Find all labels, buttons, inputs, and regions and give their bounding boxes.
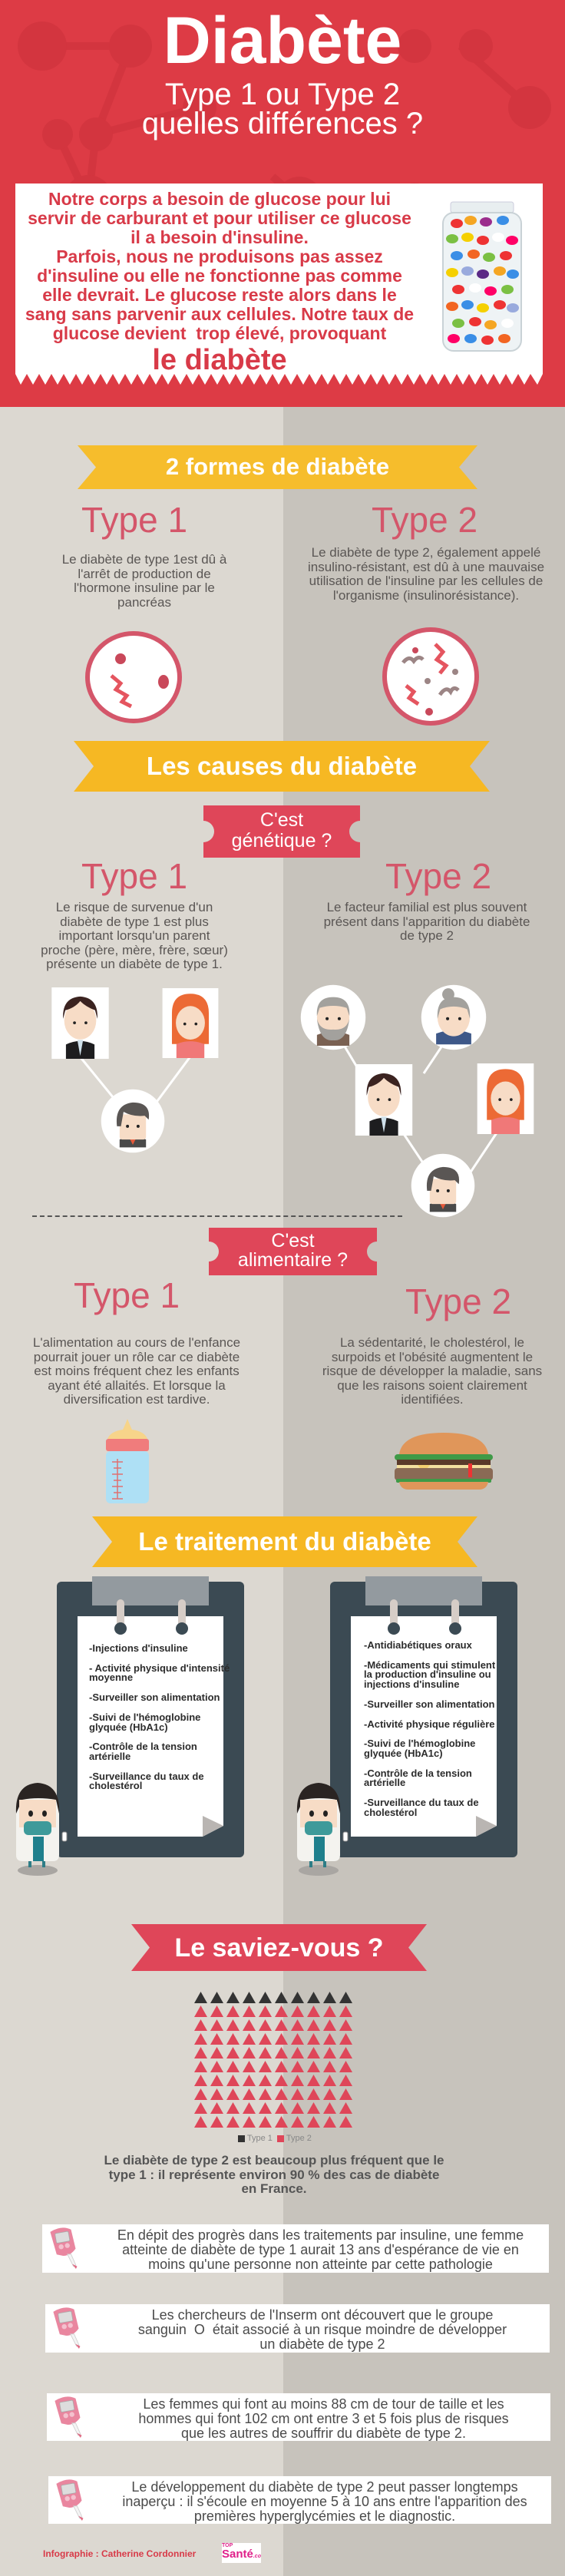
text: alimentaire type 2: risque de développer la maladie, sans	[322, 1364, 542, 1378]
intro text: Parfois, nous ne produisons pas assez	[56, 246, 383, 266]
icon: doctor	[296, 1783, 349, 1876]
list: type 1 treatments: -Surveiller son alimentation	[89, 1691, 220, 1703]
fact box 3: hommes qui font 102 cm ont entre 3 et 5 fois plus de risques	[138, 2411, 509, 2426]
text: alimentaire type 1: L'alimentation au cours de l'enfance	[33, 1335, 240, 1350]
fact box 3	[47, 2393, 550, 2441]
list: type 1 treatments	[89, 1642, 230, 1791]
banner: Les causes du diabète: Les causes du diabète	[147, 752, 417, 780]
intro text: le diabète	[152, 344, 287, 376]
fact box 2	[45, 2304, 550, 2353]
dashed separator	[32, 1215, 402, 1217]
clipboard: type 2 treatment	[296, 1576, 517, 1876]
ticket: C'est alimentaire ?	[209, 1228, 377, 1275]
text: alimentaire type 1	[33, 1335, 240, 1407]
list: type 2 treatments: -Surveiller son alimentation	[364, 1698, 494, 1710]
list: type 1 treatments: glyquée (HbA1c)	[89, 1721, 168, 1733]
banner: Le traitement du diabète	[92, 1516, 477, 1567]
legend: Type 1 Type 2	[247, 2134, 312, 2143]
avatar: father	[355, 1064, 413, 1136]
fact box 2: un diabète de type 2	[259, 2336, 385, 2352]
list: type 2 treatments: injections d'insuline	[364, 1678, 459, 1690]
header: red background with molecule pattern	[0, 0, 565, 407]
icon: glucometer	[47, 2306, 89, 2352]
text: alimentaire type 2: identifiées.	[401, 1392, 464, 1407]
text: alimentaire type 1: pourrait jouer un rôle car ce diabète	[34, 1350, 240, 1364]
list: type 2 treatments: -Médicaments qui stimulent	[364, 1659, 495, 1671]
list: type 2 treatments: la production d'insuline ou	[364, 1668, 491, 1680]
icon: glucometer	[50, 2478, 92, 2524]
ticket: C'est génétique ?: génétique ?	[232, 830, 332, 852]
fact box 3: que les autres de souffrir du diabète de type 2.	[181, 2426, 466, 2441]
text: alimentaire type 1: est moins fréquent chez les enfants	[34, 1364, 240, 1378]
list: type 2 treatments: -Antidiabétiques oraux	[364, 1639, 472, 1651]
banner: Le saviez-vous ?: Le saviez-vous ?	[174, 1933, 384, 1963]
list: type 2 treatments: cholestérol	[364, 1807, 417, 1818]
family tree type 1	[51, 987, 218, 1153]
list: type 1 treatments: - Activité physique d'intensité	[89, 1662, 230, 1674]
fact box 1: moins qu'une personne non atteinte par cette pathologie	[148, 2257, 493, 2272]
icon: jar of jelly beans	[442, 201, 522, 352]
avatar: mother	[163, 988, 218, 1058]
list: type 1 treatments: -Injections d'insuline	[89, 1642, 188, 1654]
text: genetic type 2: présent dans l'apparition du diabète	[324, 914, 530, 929]
text: type 2 definition: insulino-résistant, est dû à une mauvaise	[308, 559, 544, 574]
banner: Les causes du diabète	[74, 741, 490, 792]
text: alimentaire type 2: surpoids et l'obésité augmentent le	[332, 1350, 533, 1364]
intro text: Notre corps a besoin de glucose pour lui	[48, 189, 391, 209]
text: genetic type 1: présente un diabète de type 1.	[46, 957, 223, 971]
fact box 1: En dépit des progrès dans les traitements par insuline, une femme	[117, 2227, 524, 2243]
text: type 2 represents 90%	[104, 2153, 444, 2196]
fact box 4	[48, 2476, 551, 2524]
avatar: father	[51, 987, 109, 1059]
list: type 2 treatments: -Activité physique régulière	[364, 1718, 494, 1730]
avatar: grandmother	[421, 984, 487, 1050]
icon: glucometer	[51, 2227, 77, 2269]
intro text: servir de carburant et pour utiliser ce glucose	[28, 208, 411, 228]
intro text	[25, 189, 414, 376]
text: genetic type 1: important lorsqu'un parent	[58, 928, 210, 943]
avatar: child	[101, 1089, 164, 1153]
text: genetic type 2: Le facteur familial est plus souvent	[327, 900, 527, 914]
text: type 2 definition: Le diabète de type 2, également appelé	[312, 545, 540, 560]
fact box 1	[42, 2224, 549, 2273]
fact box 2: sanguin O était associé à un risque moindre de développer	[138, 2322, 507, 2337]
text: genetic type 1: Le risque de survenue d'un	[56, 900, 213, 914]
text: genetic type 2	[324, 900, 530, 943]
family tree type 2	[301, 984, 534, 1218]
logo: Top Santé: TOP	[222, 2543, 233, 2548]
list: type 2 treatments: glyquée (HbA1c)	[364, 1748, 443, 1759]
text: type 2 definition	[308, 545, 544, 602]
intro text: il a besoin d'insuline.	[131, 227, 309, 247]
list: type 1 treatments: -Suivi de l'hémoglobine	[89, 1711, 200, 1723]
list: type 2 treatments: -Contrôle de la tension	[364, 1767, 472, 1779]
banner: Le saviez-vous ?	[131, 1924, 427, 1971]
list: type 1 treatments: cholestérol	[89, 1780, 142, 1791]
icon: glucometer	[48, 2395, 91, 2441]
heading: Type 1 (génétique): Type 1	[81, 856, 187, 896]
icon: cell type 2	[382, 627, 479, 726]
avatar: grandfather	[301, 984, 365, 1050]
text: type 1 definition: l'hormone insuline par le	[74, 580, 215, 595]
list: type 1 treatments: -Surveillance du taux de	[89, 1771, 204, 1782]
banner: Le traitement du diabète: Le traitement du diabète	[138, 1527, 431, 1556]
fact box 4: inaperçu : il s'écoule en moyenne 5 à 10 ans entre l'apparition des	[122, 2494, 527, 2509]
fact box 4: premières hyperglycémies et le diagnostic.	[194, 2508, 455, 2524]
avatar: child	[411, 1153, 474, 1218]
avatar: mother	[477, 1063, 534, 1134]
fact box 4: Le développement du diabète de type 2 peut passer longtemps	[131, 2479, 518, 2495]
list: type 2 treatments	[364, 1639, 496, 1818]
heading: Type 2 (formes): Type 2	[372, 500, 477, 540]
logo: Top Santé	[222, 2543, 261, 2563]
chart: triangle pictogram 10% type 1 / 90% type 2	[194, 1992, 352, 2143]
list: type 1 treatments: moyenne	[89, 1672, 133, 1683]
list: type 1 treatments: artérielle	[89, 1751, 131, 1762]
intro text: glucose devient trop élevé, provoquant	[53, 323, 386, 343]
subtitle: Type 1 ou Type 2	[165, 78, 400, 111]
subtitle	[142, 78, 423, 141]
text: type 1 definition: pancréas	[117, 594, 171, 610]
text: type 2 represents 90%: Le diabète de type 2 est beaucoup plus fréquent que le	[104, 2153, 444, 2168]
text: genetic type 1: diabète de type 1 est plus	[60, 914, 209, 929]
list: type 2 treatments: -Surveillance du taux de	[364, 1797, 479, 1808]
text: alimentaire type 2: que les raisons soient clairement	[337, 1377, 527, 1393]
intro text: sang sans parvenir aux cellules. Notre taux de	[25, 304, 414, 324]
intro text: d'insuline ou elle ne fonctionne pas comme	[37, 266, 402, 286]
heading: Type 1 (alimentaire): Type 1	[74, 1275, 180, 1315]
intro text: elle devrait. Le glucose reste alors dans le	[42, 285, 397, 305]
text: genetic type 2: de type 2	[400, 928, 454, 943]
list: type 2 treatments: -Suivi de l'hémoglobine	[364, 1738, 475, 1749]
ticket: C'est alimentaire ?: alimentaire ?	[238, 1249, 348, 1271]
text: type 1 definition	[62, 552, 227, 610]
text: type 1 definition: l'arrêt de production de	[78, 567, 211, 580]
intro box	[15, 184, 543, 385]
text: alimentaire type 2: La sédentarité, le cholestérol, le	[340, 1335, 524, 1350]
text: type 2 represents 90%: type 1 : il représente environ 90 % des cas de diabète	[109, 2167, 439, 2182]
ticket: C'est alimentaire ?: C'est	[271, 1230, 315, 1252]
text: genetic type 1: proche (père, mère, frère, sœur)	[41, 943, 228, 957]
fact box 2: Les chercheurs de l'Inserm ont découvert que le groupe	[152, 2307, 493, 2323]
clipboard: type 1 treatment	[15, 1576, 244, 1876]
banner: 2 formes de diabète	[78, 445, 477, 489]
text: alimentaire type 1: diversification est tardive.	[64, 1392, 210, 1407]
text: type 2 represents 90%: en France.	[241, 2181, 307, 2196]
text: type 2 definition: l'organisme (insulinorésistance).	[333, 588, 519, 602]
fact box 1: atteinte de diabète de type 1 aurait 13 ans d'espérance de vie en	[122, 2242, 519, 2257]
text: type 2 definition: utilisation de l'insuline par les cellules de	[309, 574, 543, 588]
list: type 2 treatments: artérielle	[364, 1777, 405, 1788]
heading: Type 2 (génétique): Type 2	[385, 856, 491, 896]
icon: cell type 1	[85, 631, 182, 723]
text: genetic type 1	[41, 900, 228, 971]
ticket: C'est génétique ?	[203, 805, 360, 858]
heading: Type 2 (alimentaire): Type 2	[405, 1281, 511, 1321]
list: type 1 treatments: -Contrôle de la tension	[89, 1741, 197, 1752]
icon: baby bottle	[106, 1419, 149, 1503]
text: alimentaire type 1: ayant été allaités. Et lorsque la	[48, 1377, 226, 1393]
icon: hamburger	[395, 1433, 493, 1490]
banner: 2 formes de diabète: 2 formes de diabète	[166, 453, 389, 480]
text: type 1 definition: Le diabète de type 1est dû à	[62, 552, 226, 567]
title: Diabète	[164, 4, 401, 78]
footer: credit: Infographie : Catherine Cordonnier	[43, 2548, 196, 2559]
ticket: C'est génétique ?: C'est	[260, 809, 303, 831]
subtitle: quelles différences ?	[142, 107, 423, 141]
text: alimentaire type 2	[322, 1335, 542, 1407]
fact box 3: Les femmes qui font au moins 88 cm de tour de taille et les	[143, 2396, 504, 2412]
heading: Type 1 (formes): Type 1	[81, 500, 187, 540]
icon: doctor	[15, 1783, 68, 1876]
